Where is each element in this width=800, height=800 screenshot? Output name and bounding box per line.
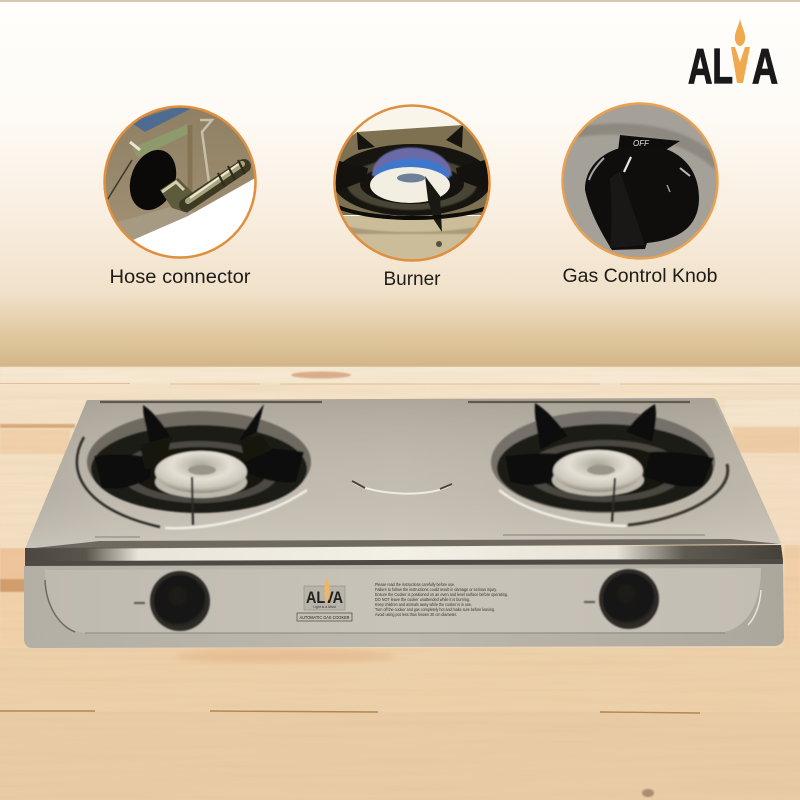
stove instructions text: DO NOT leave the cooker unattended while it is burning. [375,597,470,602]
stove instructions text [375,582,508,617]
stove top plate [25,398,781,549]
stove instructions text: Turn off the cooker and gas completely hot and make sure before leaving. [375,607,495,612]
left burner [77,404,311,528]
stove badge: ALVA logo: ALVA [306,588,343,607]
product tag [297,613,352,621]
text: OFF mark: OFF [633,139,650,148]
icon: flame and V in logo [731,19,750,83]
right knob [584,569,659,629]
recessed centre arc [352,481,452,494]
hose connector photo circle [106,108,254,256]
stove badge: ALVA logo: AUTOMATIC GAS COOKER [300,615,350,620]
stove front rim [25,545,783,562]
stove instructions text: Please read the instructions carefully before use. [375,582,455,587]
logo: ALVA: AL [688,40,733,94]
panel: hose connector [103,105,257,283]
left knob [134,571,210,631]
stove badge: ALVA logo [297,577,352,621]
stove instructions text: Failure to follow the instructions could result in damage or serious injury. [375,587,497,592]
background: cream gradient wall [0,0,800,367]
wood table surface [0,367,800,800]
stove instructions text: Ensure the Cooker is positioned on an even and level surface before operating. [375,592,508,597]
label: gas control knob: Gas Control Knob [562,266,718,287]
label: burner: Burner [384,269,441,290]
burner photo circle [336,107,488,260]
stove instructions text: Keep children and animals away while the cooker is in use. [375,602,472,607]
logo: ALVA [688,19,778,94]
gas stove [24,398,784,648]
panel: burner [330,100,497,290]
stove front panel [24,564,784,648]
panel: gas control knob [560,100,720,287]
logo: ALVA: A [752,40,778,94]
knob photo circle [564,104,716,258]
right burner [491,403,728,526]
stove instructions text: Avoid using pot less than known 20 cm diameter. [375,612,457,617]
label: hose connector: Hose connector [110,267,251,288]
stove badge: ALVA logo: Light is a Must [313,605,336,609]
